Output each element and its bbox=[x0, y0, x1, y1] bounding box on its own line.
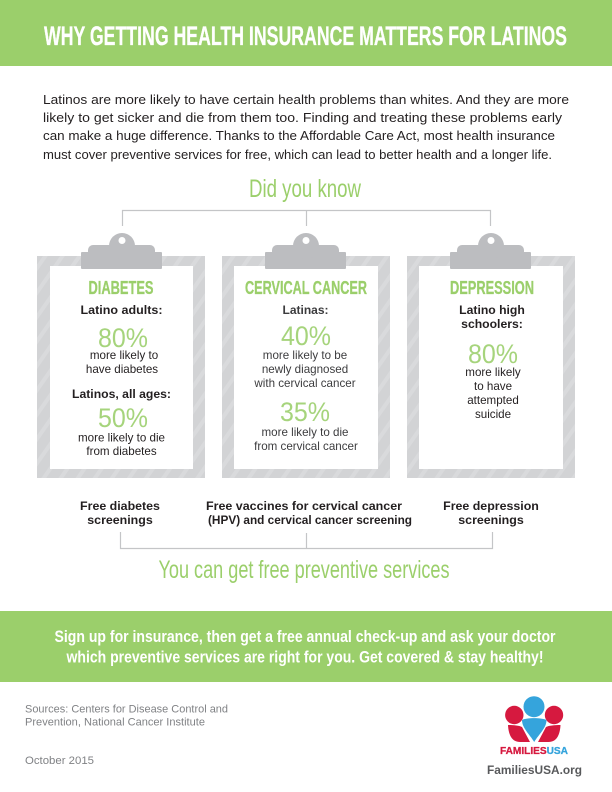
diabetes text: from diabetes bbox=[86, 445, 157, 458]
date: October 2015 bbox=[25, 755, 94, 767]
diabetes text: more likely to die bbox=[78, 432, 165, 444]
diabetes text: Latinos, all ages: bbox=[72, 389, 171, 401]
free services labels: screenings bbox=[87, 513, 153, 527]
cervical cancer text bbox=[253, 303, 358, 453]
depression text: schoolers: bbox=[461, 317, 523, 331]
panel: cervical cancer bbox=[222, 233, 390, 478]
call to action text bbox=[54, 628, 556, 666]
depression text bbox=[459, 303, 525, 421]
depression heading: DEPRESSION bbox=[450, 278, 534, 298]
panel: depression bbox=[407, 233, 575, 478]
diabetes text: more likely to bbox=[90, 349, 158, 362]
free services labels: Free depression bbox=[443, 499, 539, 513]
depression text: attempted bbox=[467, 394, 519, 407]
bottom bracket bbox=[120, 532, 492, 548]
diabetes text: Latino adults: bbox=[80, 305, 162, 317]
depression text: 80% bbox=[468, 339, 518, 369]
logo: Families USA bbox=[487, 696, 582, 777]
free services labels: Free vaccines for cervical cancer bbox=[206, 499, 402, 513]
diabetes text: 50% bbox=[98, 403, 148, 433]
diabetes text: 80% bbox=[98, 323, 148, 353]
cervical cancer text: from cervical cancer bbox=[254, 440, 358, 453]
cervical cancer text: with cervical cancer bbox=[253, 377, 356, 390]
cervical cancer text: more likely to die bbox=[262, 426, 348, 439]
heading: did you know: Did you know bbox=[249, 175, 362, 203]
icon: family figures bbox=[505, 696, 563, 742]
cervical cancer heading: CERVICAL CANCER bbox=[245, 278, 367, 298]
call to action text: which preventive services are right for you. Get covered & stay healthy! bbox=[66, 648, 544, 666]
cervical cancer text: Latinas: bbox=[282, 303, 329, 317]
sources: Sources: Centers for Disease Control and bbox=[25, 704, 228, 716]
intro paragraph: Latinos are more likely to have certain health problems than whites. And they are more bbox=[43, 93, 569, 107]
intro paragraph: must cover preventive services for free, which can lead to better health and a longer life. bbox=[43, 148, 552, 162]
depression text: to have bbox=[474, 380, 512, 393]
diabetes text bbox=[72, 305, 171, 458]
free services labels bbox=[80, 499, 539, 527]
depression text: Latino high bbox=[459, 303, 525, 317]
depression text: suicide bbox=[475, 408, 511, 421]
depression text: more likely bbox=[465, 366, 521, 379]
diabetes text: have diabetes bbox=[86, 363, 158, 376]
call to action banner bbox=[0, 611, 612, 682]
top bracket bbox=[122, 210, 490, 226]
icon: clipboard clip bbox=[265, 233, 346, 269]
heading: you can get free preventive services: You can get free preventive services bbox=[158, 556, 450, 584]
free services labels: (HPV) and cervical cancer screening bbox=[208, 513, 412, 527]
icon: clipboard clip bbox=[81, 233, 162, 269]
sources bbox=[25, 704, 228, 767]
diabetes heading: DIABETES bbox=[88, 278, 154, 298]
sources: Prevention, National Cancer Institute bbox=[25, 716, 205, 728]
intro paragraph: can make a huge difference. Thanks to the Affordable Care Act, most health insurance bbox=[43, 129, 555, 143]
intro paragraph bbox=[43, 93, 569, 162]
cervical cancer text: 40% bbox=[281, 321, 331, 351]
cervical cancer text: newly diagnosed bbox=[262, 363, 348, 376]
logo wordmark: FAMILIESUSA bbox=[500, 746, 568, 757]
cervical cancer text: 35% bbox=[280, 397, 330, 427]
intro paragraph: likely to get sicker and die from them too. Finding and treating these problems early bbox=[43, 111, 563, 125]
website: FamiliesUSA.org bbox=[487, 765, 582, 777]
panel: diabetes bbox=[37, 233, 205, 478]
free services labels: Free diabetes bbox=[80, 499, 160, 513]
header banner bbox=[0, 0, 612, 66]
icon: clipboard clip bbox=[450, 233, 531, 269]
free services labels: screenings bbox=[458, 513, 524, 527]
cervical cancer text: more likely to be bbox=[263, 349, 347, 362]
